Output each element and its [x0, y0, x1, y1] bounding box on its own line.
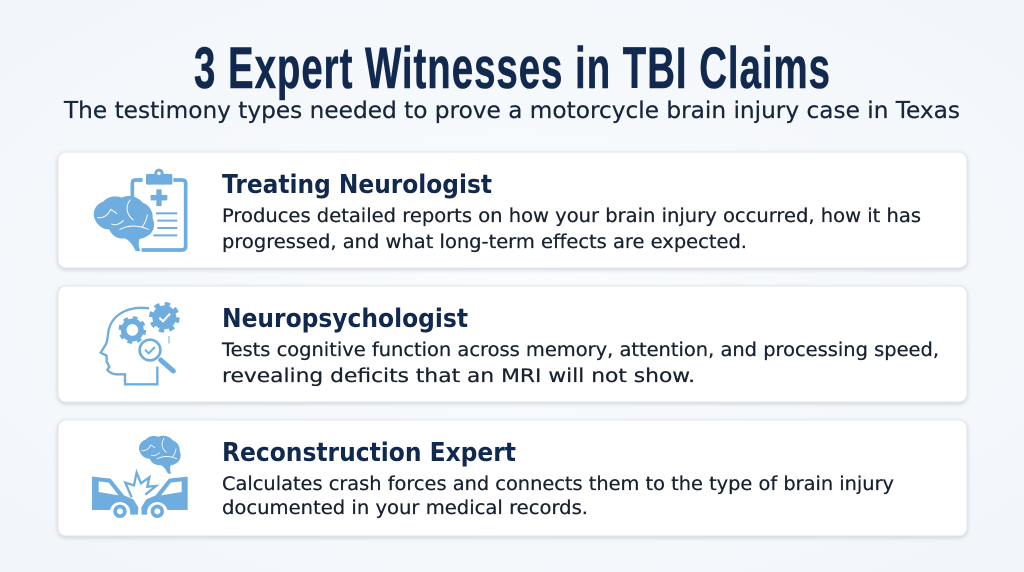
description: Produces detailed reports on how your brain injury occurred, how it has	[222, 206, 921, 227]
description: documented in your medical records.	[222, 498, 588, 519]
panel: reconstruction expert	[58, 420, 967, 536]
heading: Reconstruction Expert	[222, 438, 516, 468]
panel: neuropsychologist	[58, 286, 967, 402]
description: revealing deficits that an MRI will not show.	[222, 366, 695, 387]
icon: brain and clipboard	[94, 169, 186, 251]
panel: treating neurologist	[58, 152, 967, 268]
description: Calculates crash forces and connects them to the type of brain injury	[222, 474, 894, 495]
heading: Neuropsychologist	[222, 304, 468, 334]
description	[222, 206, 921, 253]
description: progressed, and what long-term effects are expected.	[222, 232, 747, 253]
subtitle: The testimony types needed to prove a motorcycle brain injury case in Texas	[63, 98, 960, 124]
description	[222, 474, 894, 519]
description	[221, 340, 939, 387]
icon: car crash and brain	[92, 436, 188, 518]
description: Tests cognitive function across memory, attention, and processing speed,	[221, 340, 939, 361]
icon: head with gears and magnifier	[101, 304, 178, 384]
heading: Treating Neurologist	[222, 170, 492, 200]
